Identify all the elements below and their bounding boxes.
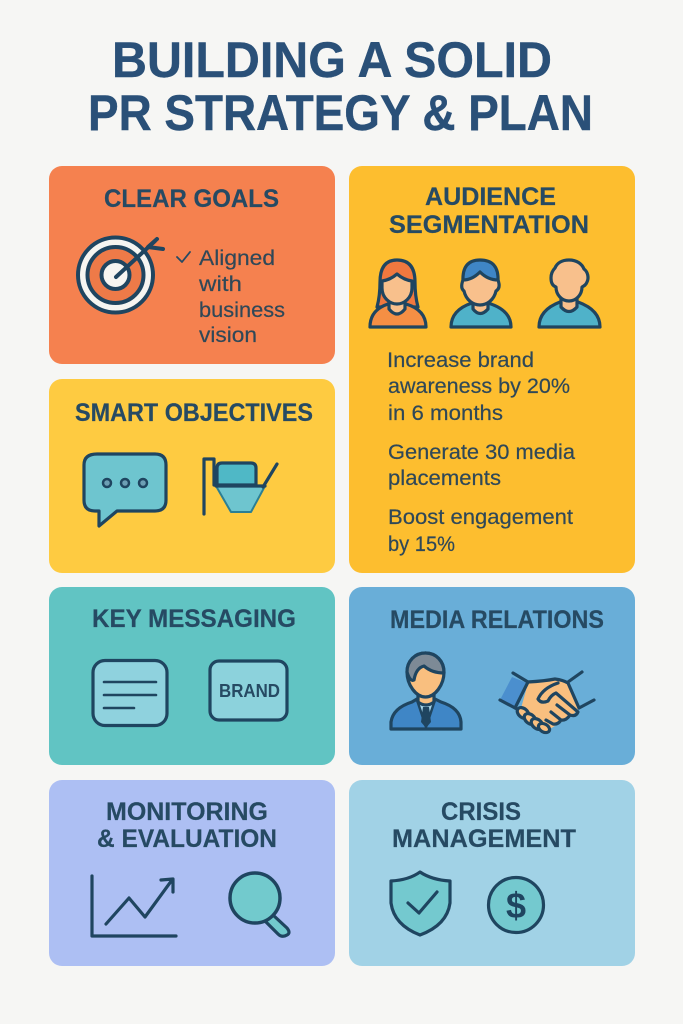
icon: brand box bbox=[210, 661, 287, 720]
heading: monitoring and evaluation: MONITORING bbox=[106, 798, 268, 826]
heading: smart objectives: SMART OBJECTIVES bbox=[75, 399, 313, 427]
icon: growth chart bbox=[92, 876, 176, 936]
heading: audience segmentation: SEGMENTATION bbox=[389, 211, 589, 239]
heading: monitoring and evaluation: & EVALUATION bbox=[97, 825, 277, 853]
text: aligned with business vision: Aligned bbox=[199, 246, 275, 270]
text: objective three: by 15% bbox=[388, 532, 455, 556]
icon: target with arrow bbox=[78, 238, 163, 312]
heading: crisis management: CRISIS bbox=[441, 798, 521, 826]
title: BUILDING A SOLID bbox=[112, 32, 552, 88]
text: objective two: Generate 30 media bbox=[388, 440, 575, 464]
text: objective one: awareness by 20% bbox=[388, 374, 570, 398]
text: objective two: placements bbox=[388, 466, 501, 490]
text: objective one bbox=[387, 348, 570, 425]
heading: crisis management bbox=[392, 798, 576, 853]
text: aligned with business vision: vision bbox=[199, 323, 257, 347]
icon: bald man bbox=[539, 260, 600, 327]
check mark bbox=[177, 252, 190, 262]
text: aligned with business vision bbox=[198, 246, 285, 347]
text: objective one: in 6 months bbox=[388, 401, 503, 425]
icon: message document bbox=[93, 660, 167, 726]
heading: audience segmentation bbox=[389, 183, 589, 239]
icon: speech bubble bbox=[84, 454, 166, 526]
title bbox=[88, 32, 593, 141]
icon: woman bbox=[370, 260, 426, 327]
text: objective one: Increase brand bbox=[387, 348, 534, 372]
heading: crisis management: MANAGEMENT bbox=[392, 825, 576, 853]
icon: magnifying glass bbox=[230, 873, 289, 936]
text: objective two bbox=[388, 440, 575, 490]
text: aligned with business vision: with bbox=[198, 272, 242, 296]
panel: crisis management bbox=[349, 780, 635, 966]
panel: audience segmentation bbox=[349, 166, 635, 573]
text: objective three: Boost engagement bbox=[388, 505, 573, 529]
title: PR STRATEGY & PLAN bbox=[88, 85, 593, 141]
panel: clear goals bbox=[49, 166, 335, 364]
heading: audience segmentation: AUDIENCE bbox=[425, 183, 556, 211]
heading: clear goals: CLEAR GOALS bbox=[104, 185, 279, 213]
icon: dollar coin: $ bbox=[506, 885, 526, 926]
icon: shield with check bbox=[391, 872, 450, 935]
icon: businessman bbox=[391, 653, 461, 729]
text: objective three bbox=[388, 505, 573, 556]
panel: key messaging bbox=[49, 587, 335, 765]
panel: smart objectives bbox=[49, 379, 335, 573]
text: aligned with business vision: business bbox=[199, 298, 285, 322]
icon: handshake bbox=[500, 672, 594, 734]
icon: dollar coin bbox=[488, 878, 544, 932]
heading: media relations: MEDIA RELATIONS bbox=[390, 606, 604, 634]
heading: key messaging: KEY MESSAGING bbox=[92, 605, 296, 633]
icon: man with blue hair bbox=[451, 260, 511, 327]
panel: monitoring and evaluation bbox=[49, 780, 335, 966]
panel: media relations bbox=[349, 587, 635, 765]
icon: basket with flag bbox=[204, 459, 277, 514]
heading: monitoring and evaluation bbox=[97, 798, 277, 853]
icon: brand box: BRAND bbox=[219, 681, 280, 701]
